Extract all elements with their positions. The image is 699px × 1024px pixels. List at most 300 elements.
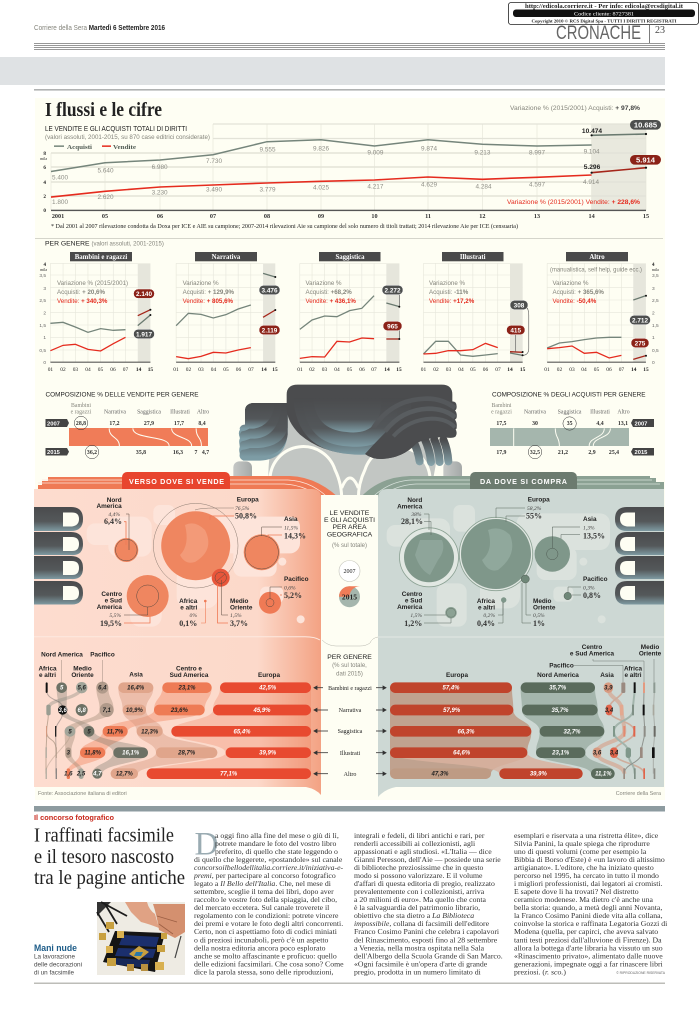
data labels sales: 4.597 [529,182,545,188]
panel: purchases by area [378,489,664,797]
year axis labels: 06 [483,367,488,373]
article column 2: del Rinascimento, esposti fino al 28 settembre [354,935,498,944]
chart heading: LE VENDITE E GLI ACQUISTI TOTALI DI DIRITTI [45,126,187,133]
photo caption [34,943,82,976]
legend [54,144,136,151]
kicker: Il concorso fotografico [34,813,114,822]
right wave [365,400,455,459]
values 2015: 35,8 [136,450,146,456]
data labels purchases [52,146,600,182]
column labels: sales: Oriente [71,672,94,679]
photo: hands working on facsimile [97,902,185,975]
values 2015: 2,9 [588,450,596,456]
data labels purchases: 7.730 [206,158,222,165]
Africa e altri [179,598,207,628]
center column: geographic label: PER AREA [332,524,367,531]
Asia: 11,5% [284,526,298,532]
Asia: 14,3% [284,532,306,540]
Nord America: 38% [410,512,422,518]
Europa [459,496,550,591]
Centro e Sud America: 1,2% [404,619,422,628]
column labels: sales: Pacifico [90,652,115,658]
column labels: purchases: Oriente [639,650,662,658]
shaded last years [592,124,646,210]
row 1: 6,4 [98,686,107,692]
grey background form [268,415,438,502]
axis labels left: 3 [43,286,46,292]
axis labels left: 4 [44,263,46,268]
Africa e altri: Africa [179,598,198,605]
chart: saggistica: Variazione % [306,280,342,287]
total percent change purchases: Variazione % (2015/2001) Acquisti: + 97,8% [510,105,640,112]
Centro e Sud America: America [97,604,122,611]
article column 3: preziosi. (r. sco.) [514,967,566,976]
column labels: purchases: Asia [600,672,614,679]
photo caption: La lavorazione [34,954,76,960]
center column: per genere: (% sul totale, [332,663,367,669]
Europa: 55% [526,512,542,520]
data labels purchases: 6.980 [152,164,168,171]
article column 3: Bibbia di Borso d'Este) è «un lavoro di altissimo [514,855,665,864]
year tags: 2015 [47,450,61,456]
callout pill sales 2015 [630,155,661,165]
article column 2: «Ogni facsimile è un'opera d'arte di grande [354,959,488,968]
row 3: 11,7% [107,729,124,735]
article column 3: esemplari e riservata a una ristretta élite», dice [514,831,659,840]
license stamp box: Copyright 2010 © RCS Digital Spa - TUTTI I DIRITTI REGISTRATI [532,19,677,24]
data labels sales: 4.284 [476,184,492,190]
bar 2007-2015 [490,428,629,446]
row 3: 32,7% [564,729,581,735]
values 2015: 16,3 [173,450,183,456]
column labels: purchases: e altri [624,672,642,679]
article [34,806,667,984]
Pacifico: 0,6% [284,586,296,592]
chart: illustrati [423,252,529,363]
row 5: 4,7 [92,772,102,778]
row 2: 7,1 [103,708,111,714]
row 4 [390,747,655,758]
year axis labels: 06 [236,367,242,373]
year axis labels: 03 [198,367,204,373]
row 1: 5 [60,686,64,692]
chart heading: (valori assoluti, 2001-2015, su 870 case editrici considerate) [45,134,210,141]
shaded years [138,264,646,362]
Nord America: 6,4% [104,517,122,526]
axis labels right [652,263,659,366]
values 2007: 27,9 [144,421,154,427]
year axis labels: 15 [148,367,153,373]
year axis labels: 05 [98,367,104,373]
genre headers: Altro [617,410,630,416]
year axis labels: 14 [261,367,267,373]
genre headers: e ragazzi [491,410,512,416]
axis labels left: mila [40,268,47,272]
row 1: 3,9 [604,686,613,692]
year axis labels: 03 [446,367,452,373]
inner arcs gradient [293,398,412,455]
chart: saggistica: 965 [387,323,398,330]
side caps [233,461,252,481]
chart: altro: 275 [635,340,646,347]
Africa e altri: 0,2% [483,613,495,619]
row 1 [46,682,311,694]
axis labels right: 0 [652,360,655,366]
row 3 [390,726,656,737]
values 2007: 30 [532,421,538,427]
values 2015: 7 [195,450,198,456]
Europa: 50,8% [235,512,257,520]
values 2007: 8,4 [198,421,206,427]
section tab: purchases [470,472,577,490]
chart: bambini e ragazzi: Bambini e ragazzi [75,254,127,261]
article column 1: o di preziosi incunaboli, però c'è un aspetto [194,935,329,944]
chart: narrativa: 3.476 [262,287,278,294]
axis labels right: 4 [652,263,655,268]
row 1: 35,7% [549,686,567,692]
y axis labels: 2 [43,194,46,200]
Pacifico: Pacifico [284,576,309,583]
total percent change sales: Variazione % (2015/2001) Vendite: + 228,6% [507,199,640,206]
year axis labels: 14 [384,367,390,373]
dividers between upper and lower sections [34,637,664,646]
Pacifico: Pacifico [583,576,608,583]
row 2: 57,9% [443,708,461,714]
Medio Oriente: 3,7% [230,619,248,628]
bubbles: sales areas [96,496,309,628]
Centro e Sud America: 5,5% [109,613,121,619]
chart: altro: Vendite: -50,4% [552,298,597,305]
chart: bambini e ragazzi: Variazione % (2015/2001) [57,280,128,287]
article column 1: legato a Il Bello dell'Italia. Che, nel mese di [194,879,331,888]
axis labels right: 2,5 [652,298,659,304]
column labels: sales: Centro e [176,666,202,672]
Centro e Sud America: Centro [402,591,422,598]
illustration: dark shapes over grey circles [233,385,462,502]
column labels: purchases: Centro [582,644,602,651]
composition of sales [46,392,209,459]
article column 2: pregio, prodotta in un numero limitato di [354,967,481,976]
axis labels right: 0,5 [652,348,659,354]
main title: I flussi e le cifre [45,99,162,121]
headline: tra le pagine antiche [34,868,185,889]
x axis labels: 11 [425,213,431,220]
article column 2: obiettivo che sta dietro a La Biblioteca [354,911,474,920]
column labels: purchases: Pacifico [549,662,574,670]
year tags: 2007 [634,421,647,427]
year axis labels: 04 [458,367,464,373]
center column: per genere: Bambini e ragazzi [328,686,372,692]
orange stripes [38,476,345,504]
purchases line [51,140,592,172]
article column 2: modo si possono valorizzare. E il volume [354,871,483,880]
chart: altro: Acquisti: + 365,6% [552,289,604,296]
world map sales [87,505,305,627]
ribbons [46,688,311,774]
genre headers: Illustrati [590,410,610,416]
genre headers [491,403,630,416]
article column 1: premi, per partecipare al concorso fotografico [193,871,336,880]
panel: sales by area [34,489,321,795]
Nord America: Nord [407,497,422,504]
page header [0,22,665,91]
year axis labels: 03 [73,367,78,373]
year axis labels: 15 [643,367,649,373]
chart: bambini e ragazzi: 1.917 [136,331,152,338]
year axis labels [48,367,649,373]
article column 3: coinvolse la storica e raffinata Legatoria Gozzi di [514,919,667,928]
chart: bambini e ragazzi [50,252,154,363]
chart: illustrati: 308 [514,302,525,309]
page number: 23 [655,25,665,36]
year axis labels: 05 [594,367,600,373]
center column: per genere: Narrativa [339,708,362,714]
article column 2: a Venezia, nella mostra ospitata nella Sala [354,943,485,952]
article column 3 [514,831,667,976]
axis labels right: mila [652,268,659,272]
row 2 [46,703,311,717]
chart: illustrati: Acquisti: -11% [429,289,469,296]
callout purchases 2014: 10.474 [582,128,602,135]
axis labels left: 2,5 [39,298,46,304]
row 2: 3,6 [59,708,67,714]
values 2015: 36,2 [87,450,97,456]
Africa e altri: e altri [180,604,198,611]
left lobes [239,403,288,461]
year axis labels: 07 [495,367,501,373]
article column 1: potrete mandare le foto del vostro libro [215,839,337,848]
axis labels right: 3 [652,286,655,292]
article column 3: i migliori professionisti, dai legatori ai cromisti. [514,879,663,888]
center column: per genere: Saggistica [338,729,363,735]
values 2015: 25,4 [609,450,619,456]
Pacifico: 0,8% [583,591,601,600]
y axis labels: 4 [43,180,46,186]
row 5 [46,768,311,779]
data labels purchases: 9.555 [260,146,276,154]
x axis labels: 13 [534,213,540,220]
x axis labels: 05 [102,213,108,220]
chart: narrativa: Vendite: + 805,6% [183,298,234,305]
Asia: Asia [284,516,298,523]
data labels sales [52,179,599,206]
ribbons chart: sales per genre [46,682,311,779]
center column: per genere: PER GENERE [327,654,372,661]
center column: geographic label: (% sul totale) [332,543,367,549]
column labels: purchases: Europa [446,672,468,679]
Medio Oriente: 1% [533,619,545,628]
year axis labels: 02 [557,367,562,373]
year tags: 2015 [634,450,648,456]
Nord America: America [397,503,423,510]
source right: Corriere della Sera [616,791,661,797]
Nord America: 4,4% [108,512,120,518]
Africa e altri: 0% [190,613,197,619]
axis labels right: 2 [652,310,655,316]
row 1: 5,6 [78,686,86,692]
article column 3: percorso nel 1995, ha cercato in tutto il mondo [514,871,659,880]
y axis labels: 0 [43,208,46,214]
values 2007: 35 [567,421,573,427]
article column 2: è la salvaguardia del patrimonio librario, [354,903,480,912]
row 3: 5 [68,729,72,735]
row 5: 1,6 [64,772,73,778]
year axis labels: 05 [470,367,476,373]
chart: illustrati: 415 [510,327,521,334]
row 1: 42,5% [258,686,277,692]
data labels sales: 1.800 [52,199,68,206]
Pacifico [259,576,309,614]
Centro e Sud America [397,591,457,628]
article column 2: impossibile, collana di facsimili dell'editore [354,919,490,928]
Nord America [96,497,138,562]
Africa e altri: Africa [477,598,495,605]
Europa [153,496,259,588]
chart: bambini e ragazzi: 2.140 [136,291,152,298]
Pacifico: 0,3% [583,586,595,592]
column labels: sales: Asia [129,672,143,678]
row 5: 77,1% [220,772,238,778]
sales line [51,175,592,197]
year axis labels: 05 [347,367,352,373]
article column 2: renderli accessibili ai collezionisti, agli [354,839,475,848]
year axis labels: 01 [173,367,179,373]
row 1: 23,1% [178,686,196,692]
data labels sales: 2.620 [98,194,114,201]
year axis labels: 02 [433,367,439,373]
chart: saggistica: Vendite: + 436,1% [306,298,356,305]
genre headers: e ragazzi [71,410,92,416]
section tab: purchases: DA DOVE SI COMPRA [480,477,567,486]
Medio Oriente: 1,5% [230,613,242,619]
values 2015 [496,445,619,459]
arrows to left bars [314,686,328,775]
row 1 [390,682,655,693]
section tab: sales: VERSO DOVE SI VENDE [129,477,224,486]
legend: Vendite [113,144,136,151]
article column 3: Silvia Panini, la quale spiega che riprodurre [514,839,650,848]
chart: altro: Altro [589,254,605,261]
x axis labels [52,213,649,220]
Africa e altri: e altri [478,604,495,611]
values 2015: 4,7 [202,450,209,456]
ribbons [390,688,655,774]
center column: per genere: Altro [344,772,356,778]
article column 2: a 20 milioni di euro». Ma quello che conta [354,895,486,904]
row 2: 45,9% [253,708,271,714]
year axis labels: 01 [48,367,53,373]
year axis labels: 07 [371,367,377,373]
Medio Oriente: 0,5% [533,613,545,619]
section heading: PER GENERE (valori assoluti, 2001-2015) [45,240,164,248]
data labels purchases: 5.640 [98,167,114,174]
year axis labels: 06 [606,367,612,373]
row 2: 6,8 [78,708,86,714]
bubbles: purchase areas [397,496,608,628]
chart: saggistica: Saggistica [335,254,365,261]
values 2007: 17,7 [174,421,184,427]
article column 1: Certo, non ci aspettiamo foto di codici miniati [194,927,337,936]
chart: saggistica [300,252,403,363]
chart: narrativa [176,252,280,363]
license stamp box: http://edicola.corriere.it - Per info: edicola@rcsdigital.it [525,3,684,10]
Europa: 76,5% [235,506,250,512]
center column [321,495,378,800]
center column: per genere [327,654,372,778]
chart: bambini e ragazzi: Acquisti: + 20,6% [57,289,105,296]
center column: geographic label: E GLI ACQUISTI [324,517,375,524]
year axis labels: 04 [211,367,216,373]
axis labels right: 1,5 [652,323,659,329]
row 4 [46,747,311,758]
Medio Oriente: Oriente [230,604,253,612]
year axis labels: 14 [507,367,513,373]
year axis labels: 01 [297,367,303,373]
article column 1: raccolto le vostre foto della spiaggia, del cibo, [194,895,337,904]
Pacifico: 5,2% [284,591,302,600]
values 2015: 32,5 [530,450,540,456]
Centro e Sud America: America [397,604,423,611]
article column 2 [354,831,503,976]
article column 3: «Rinascimento privato», alimentato dalle nuove [514,951,663,960]
year tags [46,419,69,456]
year axis labels: 15 [520,367,526,373]
year axis labels: 04 [85,367,91,373]
values 2007 [496,417,628,430]
genre headers: Bambini [71,403,91,409]
composition of purchases [490,392,654,459]
Europa: 58,2% [527,506,542,512]
year axis labels: 07 [248,367,254,373]
Europa: Europa [528,496,550,504]
Medio Oriente: Medio [533,598,552,605]
article column 1: anche se molto affascinante e proficuo: quello [194,951,337,960]
column labels: sales: Medio [73,666,92,672]
chart: illustrati: Vendite: +17,2% [429,298,475,305]
Africa e altri: 0,1% [179,619,197,628]
article column 2: integrali e fedeli, di libri antichi e rari, per [354,831,485,840]
article column 3: allora la bottega d'arte libraria ha vissuto un suo [514,943,663,952]
year axis labels: 15 [396,367,402,373]
right dark tabs [615,507,664,605]
article column 1: di quello che leggerete, «postandole» sul canale [194,855,343,864]
Asia: 13,5% [583,532,605,540]
data labels sales: 4.629 [421,182,437,188]
Nord America [397,497,458,587]
Centro e Sud America [97,575,169,628]
axis labels right: 1 [652,335,655,341]
values 2007: 17,2 [109,421,120,427]
article column 1: della nostra editoria ancora poco esplorato [194,943,326,952]
data labels purchases: 9.009 [367,150,384,156]
row 4: 39,9% [259,751,277,757]
section tab: sales [122,472,230,490]
Asia [535,516,605,572]
drop cap: D [194,826,218,862]
grey-green stripes [355,476,664,504]
article column 1: dei premi e votare le foto degli altri concorrenti. [194,919,343,928]
data labels sales: 4.025 [313,184,329,192]
Africa e altri [477,597,506,628]
values 2007: 17,5 [496,421,507,427]
left dark tabs [34,507,83,605]
article column 1: preferito, di quello che state leggendo o [215,847,338,856]
source left: Fonte: Associazione italiana di editori [38,791,127,797]
column labels: sales: Sud America [170,672,209,679]
row 4: 64,6% [453,751,471,757]
headline: I raffinati facsimile [34,826,174,846]
copyright note: © RIPRODUZIONE RISERVATA [616,971,666,975]
